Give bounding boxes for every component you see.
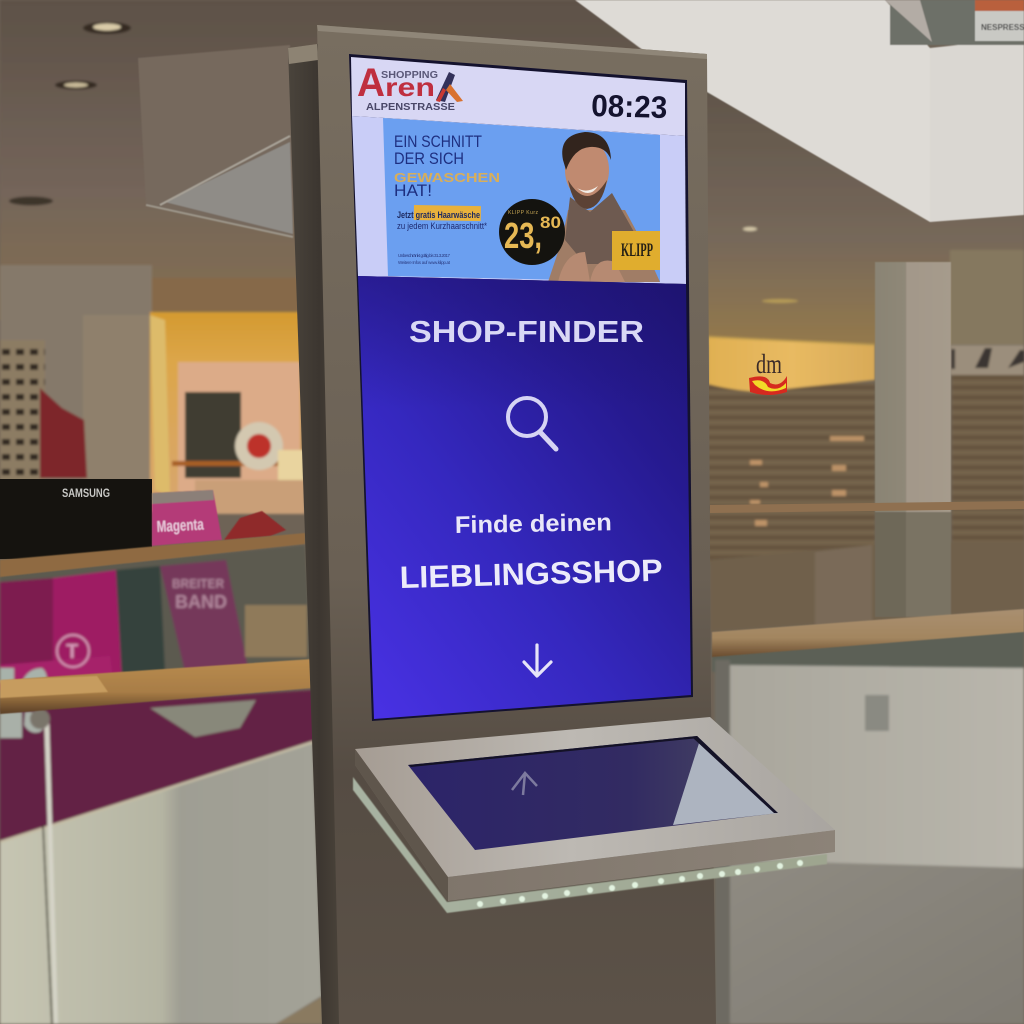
logo: Shopping Arena Alpenstrasse: A [357, 61, 385, 105]
dm logo [749, 349, 787, 395]
ad: Klipp: Jetzt gratis Haarwäsche [397, 210, 480, 221]
kiosk screen [349, 54, 693, 721]
glass balustrade with Telekom reflection: BAND [175, 592, 227, 612]
dm logo: dm [756, 349, 782, 379]
ad headline: DER SICH [394, 149, 464, 168]
Breitband poster text: BREITER [172, 576, 225, 591]
logo: Shopping Arena Alpenstrasse [357, 61, 463, 113]
lower balustrade left [0, 690, 322, 1024]
thin upper rail right [710, 501, 1024, 513]
background right: dm store and shutters [705, 337, 1024, 632]
LED strip [353, 777, 827, 913]
touch shelf [353, 717, 835, 913]
shelf front edge [355, 750, 835, 901]
glass balustrade with Telekom reflection [0, 545, 312, 690]
ad headline: HAT! [394, 181, 432, 200]
pillar [875, 262, 951, 617]
screen bezel [349, 54, 693, 721]
ad: Klipp: zu jedem Kurzhaarschnitt* [397, 221, 487, 231]
steel frame [355, 717, 835, 877]
logo: Shopping Arena Alpenstrasse: SHOPPING [381, 69, 438, 81]
clock: 08:23 [591, 88, 668, 125]
portrait [548, 132, 660, 282]
glass balustrade with Telekom reflection: T [66, 641, 78, 663]
lower wooden rail left [0, 659, 312, 714]
panel: lit shop left [0, 265, 305, 514]
Samsung sign [0, 479, 152, 559]
kiosk body [288, 25, 716, 1024]
ad: Klipp: Weitere Infos auf www.klipp.at [398, 260, 451, 265]
price badge: 80 [540, 213, 561, 232]
header bar [351, 57, 685, 136]
Telekom T logo [57, 635, 89, 667]
Samsung sign: SAMSUNG [62, 486, 110, 500]
Klipp logo: KLIPP [621, 240, 653, 261]
highlight [414, 205, 481, 221]
ad headline: EIN SCHNITT [394, 132, 482, 151]
ad headline [394, 132, 482, 200]
price badge [499, 199, 565, 265]
icon: magnifier [508, 398, 556, 449]
white concrete soffit, top right [575, 0, 1024, 222]
left ceiling box [138, 45, 293, 237]
price badge: 23, [504, 215, 542, 256]
logo: Shopping Arena Alpenstrasse: ALPENSTRASSE [366, 102, 455, 113]
heading: Shop-Finder: SHOP-FINDER [409, 314, 644, 349]
inset touch display [408, 736, 778, 850]
upper wooden rail left [0, 533, 305, 577]
text: Finde deinen: Finde deinen [455, 509, 612, 539]
lower right balustrade [712, 628, 1024, 1024]
logo: Shopping Arena Alpenstrasse: ren [385, 72, 435, 102]
price badge: KLIPP Kurz [508, 210, 538, 216]
icon: down arrow [524, 645, 551, 676]
ad: Klipp [383, 118, 660, 282]
main screen purple [358, 276, 691, 719]
ad: Klipp: GEWASCHEN [394, 170, 500, 185]
brick lattice [0, 340, 45, 480]
Magenta sign [152, 490, 286, 546]
text: Lieblingsshop: LIEBLINGSSHOP [399, 553, 663, 595]
wooden rail right [712, 609, 1024, 657]
red display [40, 388, 87, 478]
ad: Klipp: Unbeschränkt gültig bis 31.3.2017 [398, 253, 450, 258]
Klipp logo [612, 231, 660, 270]
ad band [352, 116, 686, 284]
Magenta sign: Magenta [156, 517, 204, 536]
